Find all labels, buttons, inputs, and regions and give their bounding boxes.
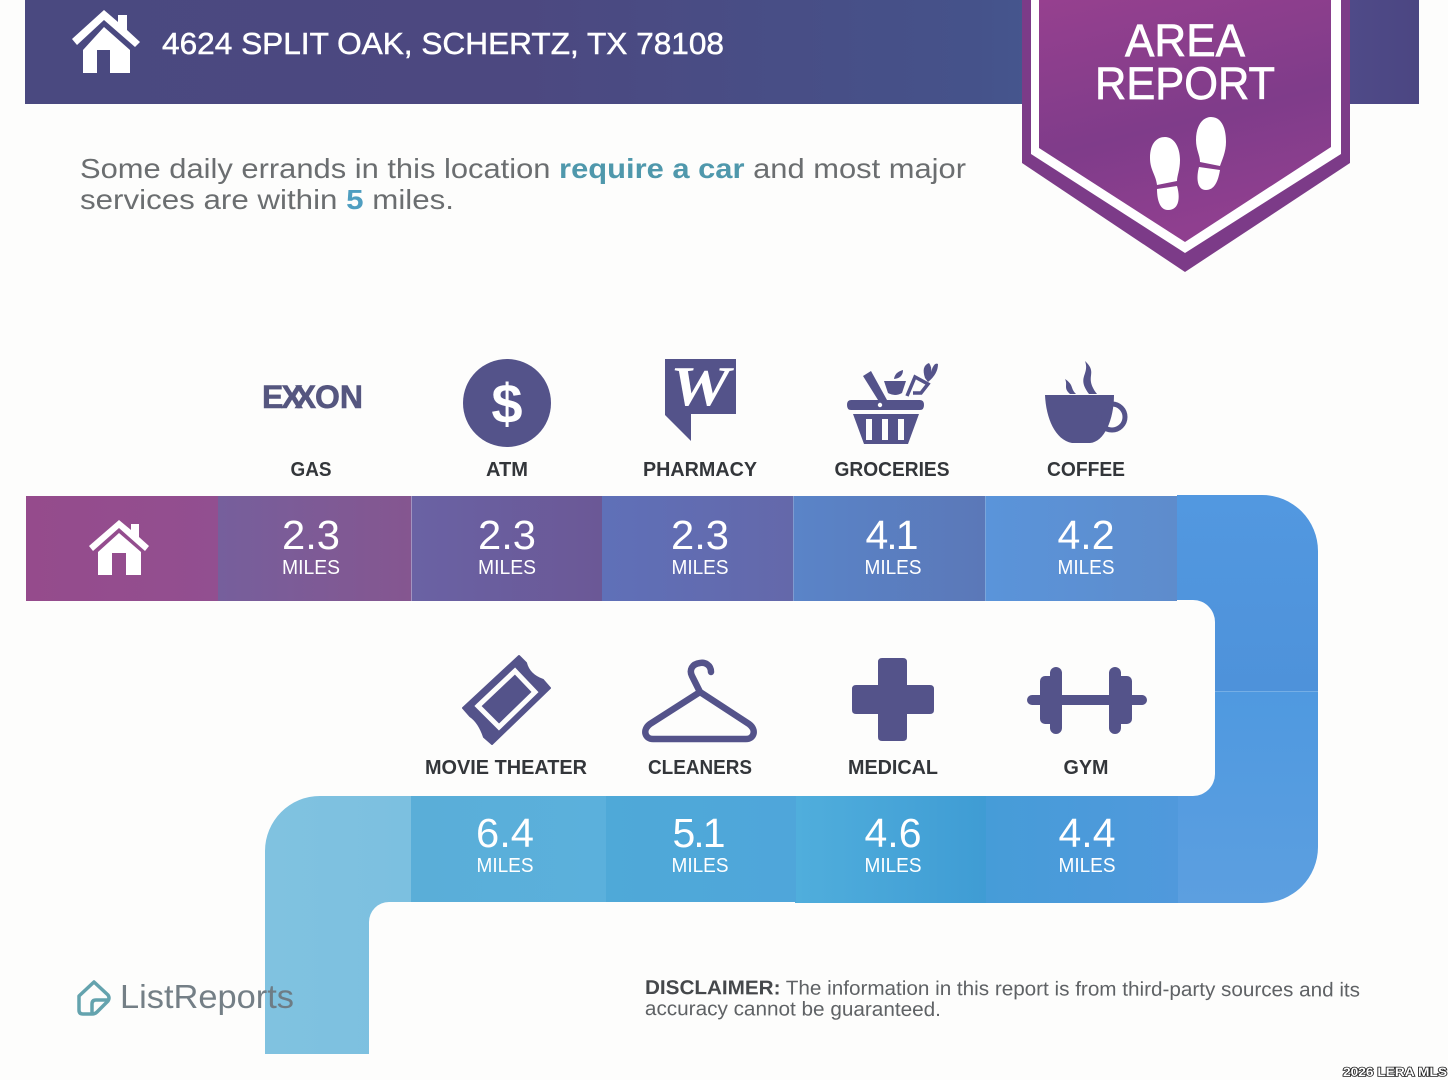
disclaimer — [645, 977, 1360, 1022]
disclaimer: DISCLAIMER: The information in this report is from third-party sources and its — [645, 977, 1360, 1001]
cleaners distance — [672, 810, 728, 877]
intro text: services are within 5 miles. — [80, 184, 454, 215]
distances: bottom row — [476, 810, 1116, 877]
route ribbon — [26, 495, 1318, 1054]
icon: ticket — [463, 656, 550, 744]
distances: top row — [282, 512, 1114, 579]
movie theater distance: 6.4 — [476, 810, 534, 856]
movie theater distance — [476, 810, 534, 877]
item: medical — [848, 658, 938, 779]
icon: listreports mark — [79, 982, 109, 1014]
gym distance — [1058, 810, 1116, 877]
listreports logo — [79, 978, 294, 1015]
address title: 4624 SPLIT OAK, SCHERTZ, TX 78108 — [162, 26, 724, 61]
pharmacy distance — [671, 512, 729, 579]
medical distance: MILES — [864, 855, 922, 877]
groceries distance: MILES — [864, 557, 922, 579]
pharmacy distance: 2.3 — [671, 512, 729, 558]
medical distance: 4.6 — [864, 810, 922, 856]
badge: area report — [1022, 0, 1350, 272]
atm distance: MILES — [478, 557, 536, 579]
groceries distance — [864, 512, 922, 579]
intro text: Some daily errands in this location require a car and most major — [80, 153, 966, 184]
medical distance — [864, 810, 922, 877]
badge title — [1095, 15, 1275, 109]
item: atm — [463, 359, 551, 481]
atm distance: 2.3 — [478, 512, 536, 558]
icon: dumbbell — [1027, 667, 1147, 734]
icon: hanger — [645, 663, 754, 739]
icon: exxon logo: EXXON — [262, 379, 363, 415]
wordmark: ListReports — [120, 978, 294, 1015]
label: gas: GAS — [290, 459, 332, 481]
label: gym: GYM — [1064, 757, 1108, 779]
badge title: REPORT — [1095, 58, 1275, 109]
item: gym — [1027, 667, 1147, 779]
icon: coffee cup — [1045, 361, 1125, 443]
gym distance: 4.4 — [1058, 810, 1116, 856]
item: movie theater — [425, 656, 588, 779]
label: cleaners: CLEANERS — [648, 757, 752, 779]
gas distance: MILES — [282, 557, 340, 579]
intro text — [80, 153, 966, 215]
cleaners distance: 5.1 — [672, 810, 726, 856]
item: pharmacy — [643, 356, 758, 481]
label: coffee: COFFEE — [1047, 459, 1125, 481]
label: atm: ATM — [486, 459, 528, 481]
coffee distance: 4.2 — [1058, 512, 1114, 558]
movie theater distance: MILES — [476, 855, 534, 877]
badge title: AREA — [1125, 15, 1245, 66]
header band — [25, 0, 1419, 104]
coffee distance — [1058, 512, 1114, 579]
cleaners distance: MILES — [672, 855, 728, 877]
icon: walgreens speech bubble: W — [670, 356, 735, 418]
icon: route start house — [89, 520, 149, 575]
icon: dollar coin: $ — [491, 372, 523, 435]
groceries distance: 4.1 — [866, 512, 918, 558]
icon: header house — [72, 10, 140, 73]
item: gas — [262, 379, 363, 481]
pharmacy distance: MILES — [672, 557, 728, 579]
item: coffee — [1045, 361, 1125, 481]
gas distance: 2.3 — [282, 512, 340, 558]
gas distance — [282, 512, 340, 579]
label: groceries: GROCERIES — [834, 459, 950, 481]
coffee distance: MILES — [1058, 557, 1114, 579]
icon: medical cross — [852, 658, 934, 741]
atm distance — [478, 512, 536, 579]
icon: basket — [847, 363, 938, 444]
label: movie theater: MOVIE THEATER — [425, 757, 588, 779]
icon: footprints — [1150, 117, 1226, 210]
gym distance: MILES — [1058, 855, 1116, 877]
watermark: 2026 LERA MLS — [1343, 1065, 1447, 1079]
label: medical: MEDICAL — [848, 757, 938, 779]
item: groceries — [834, 363, 950, 481]
disclaimer: accuracy cannot be guaranteed. — [645, 998, 941, 1021]
item: cleaners — [645, 663, 754, 779]
label: pharmacy: PHARMACY — [643, 459, 758, 481]
